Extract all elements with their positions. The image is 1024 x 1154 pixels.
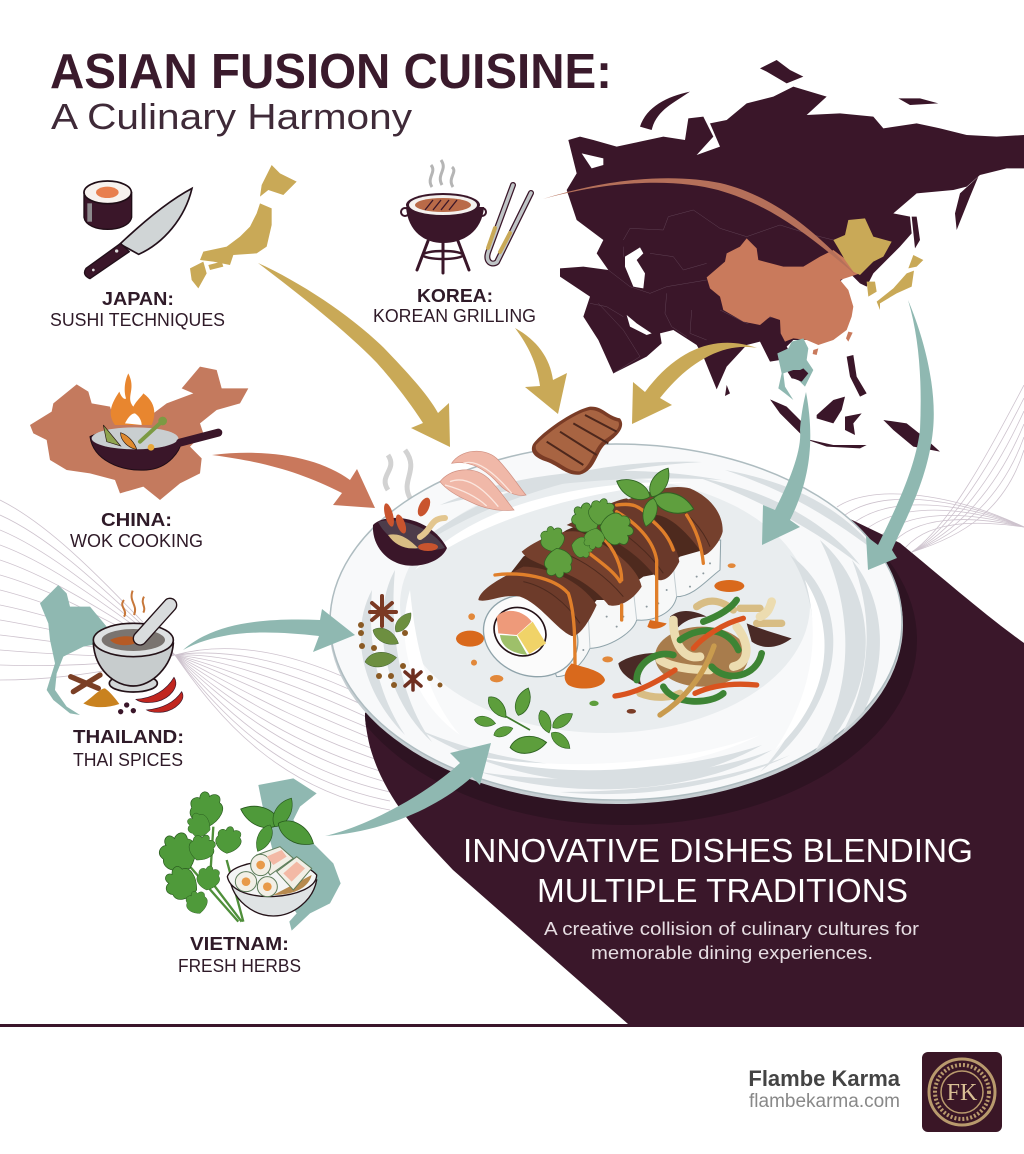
plate: [329, 444, 917, 825]
salmon sashimi slices: [440, 451, 526, 510]
grilled steak: [532, 407, 622, 475]
knife icon: [85, 188, 192, 279]
stir-fried vegetables: [589, 600, 792, 715]
small wok on plate: [373, 450, 447, 566]
label: Korea: [373, 286, 536, 326]
label: Korea: KOREA:: [417, 286, 493, 306]
sushi roll icon: [84, 181, 132, 229]
footer brand text: flambekarma.com: [749, 1091, 900, 1112]
label: Thailand: [73, 727, 184, 770]
herb garnish on roll: [537, 464, 696, 580]
label: Vietnam: VIETNAM:: [190, 934, 289, 954]
footer rule: [0, 1024, 1024, 1027]
footer logo: [922, 1052, 1002, 1132]
headline text block: [463, 832, 973, 963]
label: Korea: KOREAN GRILLING: [373, 306, 536, 326]
footer logo: FK: [947, 1080, 978, 1106]
label: Japan: [50, 289, 225, 330]
label: China: [70, 510, 203, 551]
label: Vietnam: FRESH HERBS: [178, 956, 301, 976]
headline text block: MULTIPLE TRADITIONS: [537, 872, 908, 909]
headline text block: A creative collision of culinary cultures for: [544, 919, 919, 939]
mortar and pestle: [93, 591, 173, 692]
spices on plate: [358, 596, 442, 690]
spices: cinnamon, powder, chillies: [71, 675, 183, 714]
headline text block: memorable dining experiences.: [591, 943, 873, 963]
food illustration on plate: [440, 407, 792, 755]
arrow: thin arc across Asia: [543, 178, 856, 275]
headline text block: INNOVATIVE DISHES BLENDING: [463, 832, 973, 869]
label: Japan: SUSHI TECHNIQUES: [50, 310, 225, 330]
label: Vietnam: [178, 934, 301, 976]
label: China: CHINA:: [101, 510, 172, 530]
dark curved backdrop panel: [365, 519, 1024, 1024]
China map: [30, 367, 248, 500]
wok icon: [90, 373, 218, 470]
arrow: Thailand map to plate: [762, 392, 810, 545]
map of Asia: [560, 60, 1024, 452]
arrow: Korea to plate: [515, 328, 567, 414]
label: Thailand: THAI SPICES: [73, 750, 183, 770]
arrow: Vietnam to plate: [325, 743, 491, 836]
sushi roll: [456, 487, 744, 691]
Thailand map: [40, 585, 107, 715]
footer brand text: [748, 1066, 901, 1112]
arrow: Japan map to plate: [866, 300, 934, 570]
label: Japan: JAPAN:: [102, 289, 174, 309]
footer brand text: Flambe Karma: [748, 1066, 901, 1091]
Vietnam map: [258, 778, 341, 931]
title: A Culinary Harmony: [51, 96, 412, 137]
arrow: Asia map to plate: [632, 343, 757, 424]
bowl with spring rolls: [227, 847, 317, 916]
label: Thailand: THAILAND:: [73, 727, 184, 747]
arrow: Japan to plate: [258, 263, 450, 447]
Japan icon: sushi and knife: [30, 165, 297, 500]
Korea icon: grill and tongs: [401, 160, 531, 273]
arrow: China to plate: [212, 453, 375, 508]
herb sprig: [474, 686, 576, 755]
Japan map: [190, 165, 297, 288]
title: ASIAN FUSION CUISINE:: [50, 45, 612, 99]
label: China: WOK COOKING: [70, 531, 203, 551]
herbs: [152, 789, 318, 922]
title: [50, 45, 612, 137]
arrow: Thailand to plate: [183, 609, 355, 652]
Thailand icon group: [40, 585, 341, 931]
